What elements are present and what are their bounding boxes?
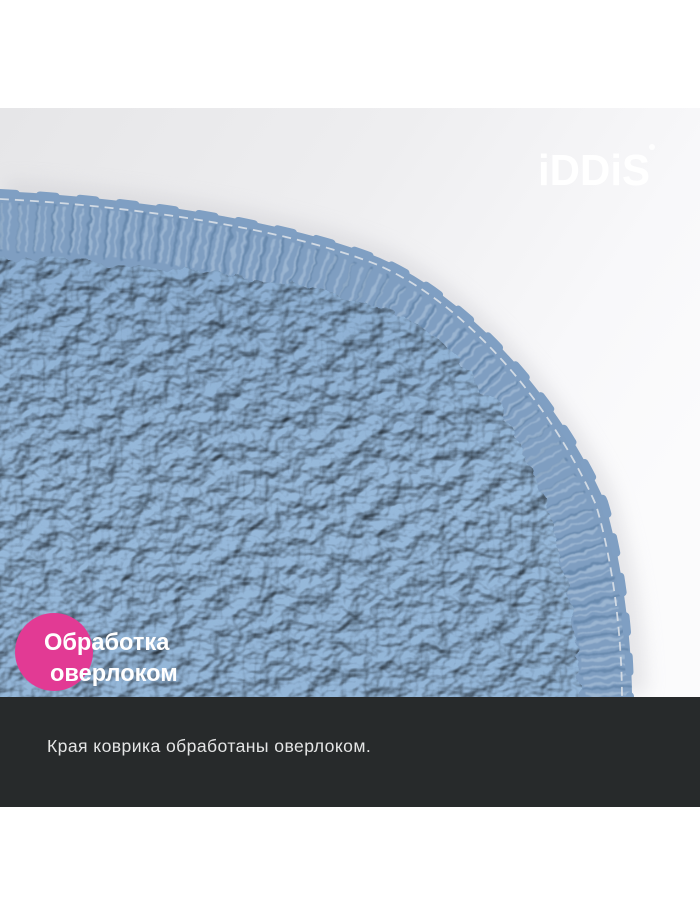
logo: IDDIS: iDDiS — [538, 146, 650, 195]
border strands — [0, 226, 608, 700]
stitching thread — [0, 199, 622, 700]
rug shadow — [6, 180, 646, 694]
photo background — [0, 108, 696, 356]
rug: overlock border band — [0, 191, 632, 700]
badge title: оверлоком — [50, 661, 178, 687]
caption text: Края коврика обработаны оверлоком. — [47, 736, 371, 756]
scalloped outer edge — [0, 193, 630, 700]
badge: pink circle — [15, 613, 93, 691]
caption band — [0, 697, 700, 807]
badge title: Обработка — [44, 630, 170, 656]
rug: pile — [0, 257, 582, 716]
photo: rug corner on light background — [0, 108, 700, 716]
